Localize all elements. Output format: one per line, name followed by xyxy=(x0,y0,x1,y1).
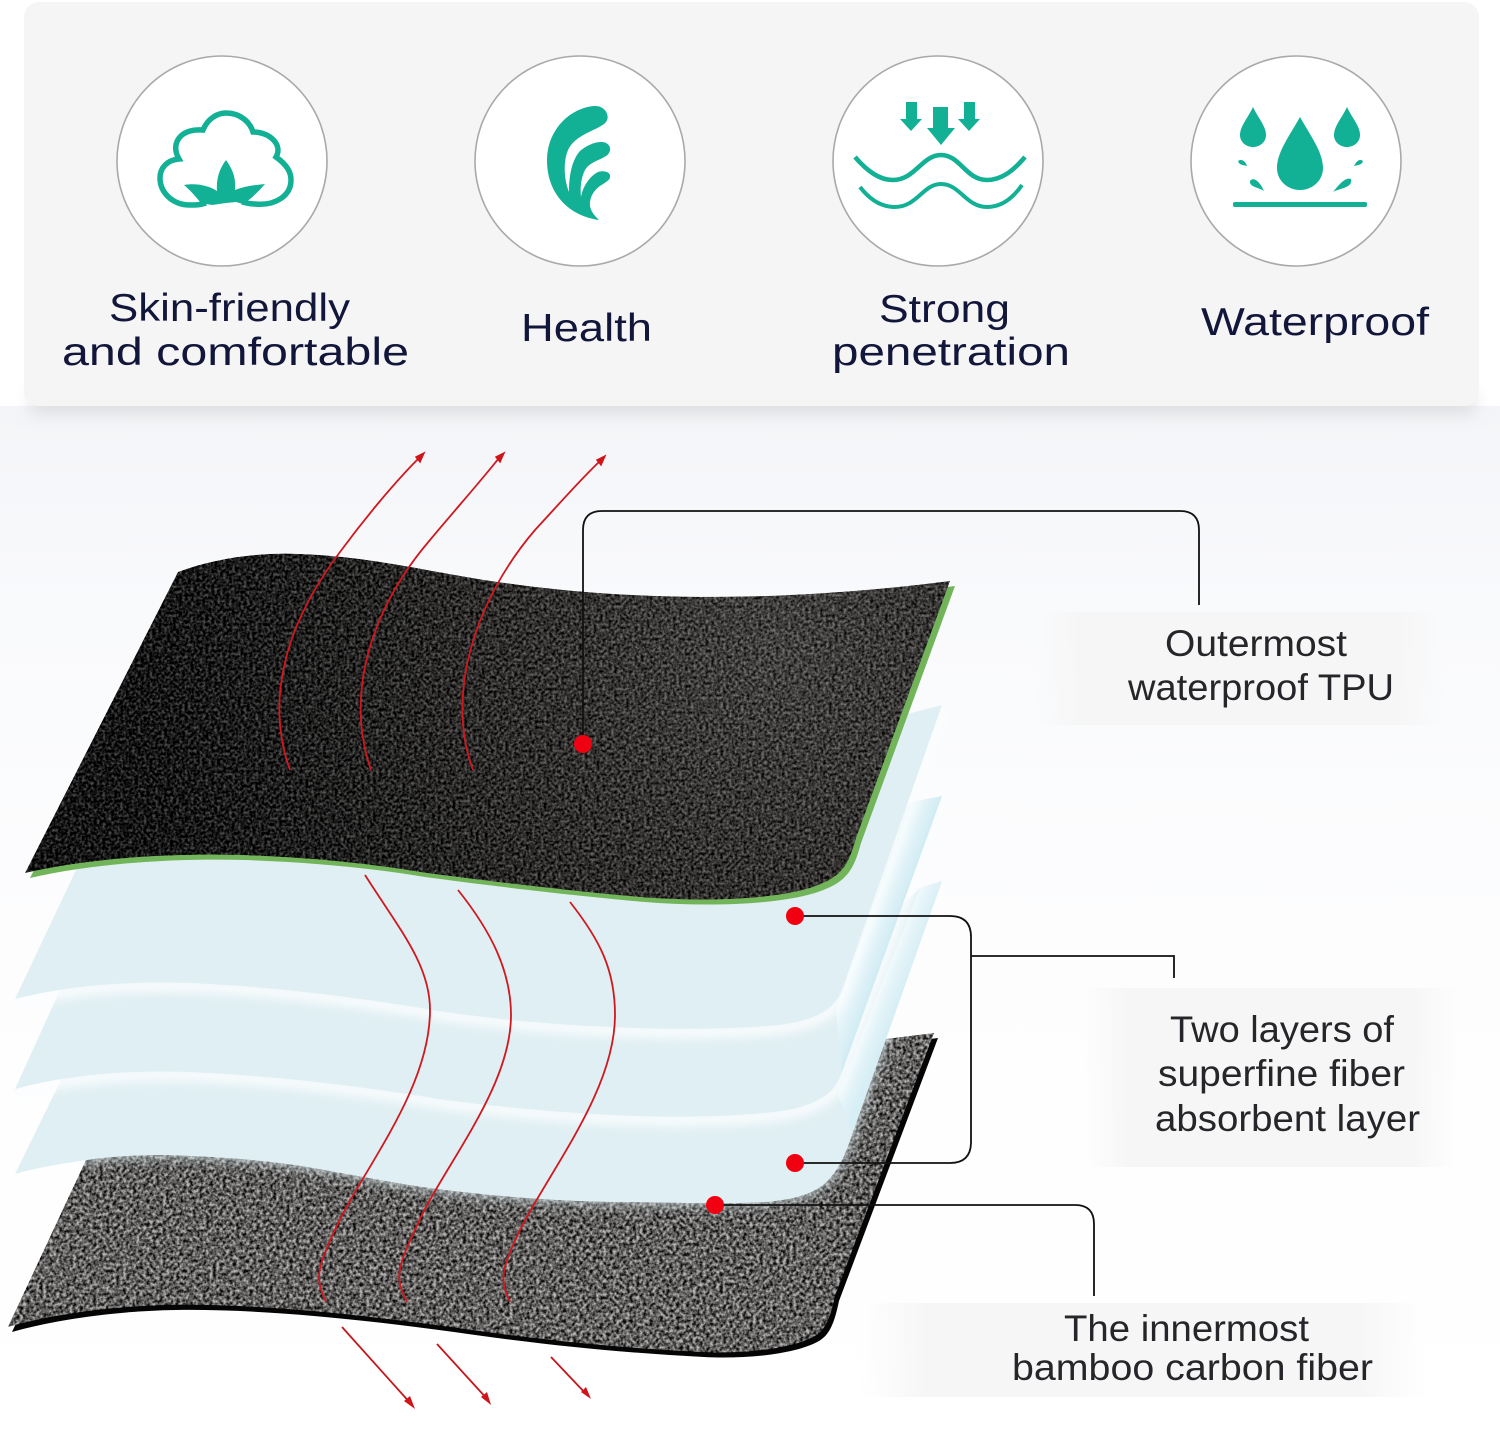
feature: waterproof xyxy=(1191,56,1429,344)
feature: skin-friendly: and comfortable xyxy=(62,331,409,374)
callout: innermost bamboo carbon fiber: The innermost xyxy=(1064,1308,1310,1349)
callout: outermost waterproof TPU: Outermost xyxy=(1165,623,1348,664)
icon: cotton boll xyxy=(160,113,291,205)
feature: skin-friendly xyxy=(62,56,409,374)
callout: two layers of superfine fiber: absorbent layer xyxy=(1155,1098,1420,1139)
icon: leaf swoosh xyxy=(547,106,610,220)
layer: lower absorbent sheet xyxy=(15,881,942,1203)
layer: upper absorbent sheet xyxy=(15,705,942,1032)
icon: arrows over waves xyxy=(855,102,1025,207)
callout: outermost waterproof TPU: waterproof TPU xyxy=(1127,667,1394,708)
callout: innermost bamboo carbon fiber xyxy=(706,1196,1373,1388)
header panel: feature icons xyxy=(24,2,1479,414)
callout: outermost waterproof TPU xyxy=(574,511,1394,753)
feature: strong penetration xyxy=(832,56,1070,374)
airflow lines through middle layers xyxy=(319,875,615,1302)
feature: skin-friendly: Skin-friendly xyxy=(109,287,351,330)
callout: two layers of superfine fiber: superfine fiber xyxy=(1158,1053,1405,1094)
feature: strong penetration: penetration xyxy=(832,331,1070,374)
feature: health xyxy=(475,56,685,350)
feature: health: Health xyxy=(521,307,652,350)
layer: innermost bamboo carbon fiber xyxy=(8,1033,938,1357)
callout: two layers of superfine fiber: Two layers of xyxy=(1170,1009,1395,1050)
label plates xyxy=(860,612,1457,1397)
callout: innermost bamboo carbon fiber: bamboo carbon fiber xyxy=(1012,1347,1373,1388)
airflow arrows up xyxy=(279,453,605,770)
layer: outermost waterproof TPU xyxy=(25,554,955,905)
callout: two layers of superfine fiber xyxy=(786,907,1420,1172)
icon: water drops xyxy=(1233,107,1367,207)
layer: middle absorbent sheet xyxy=(15,796,942,1120)
feature: strong penetration: Strong xyxy=(879,288,1010,331)
feature: waterproof: Waterproof xyxy=(1201,301,1429,344)
airflow arrows down xyxy=(342,1327,591,1409)
